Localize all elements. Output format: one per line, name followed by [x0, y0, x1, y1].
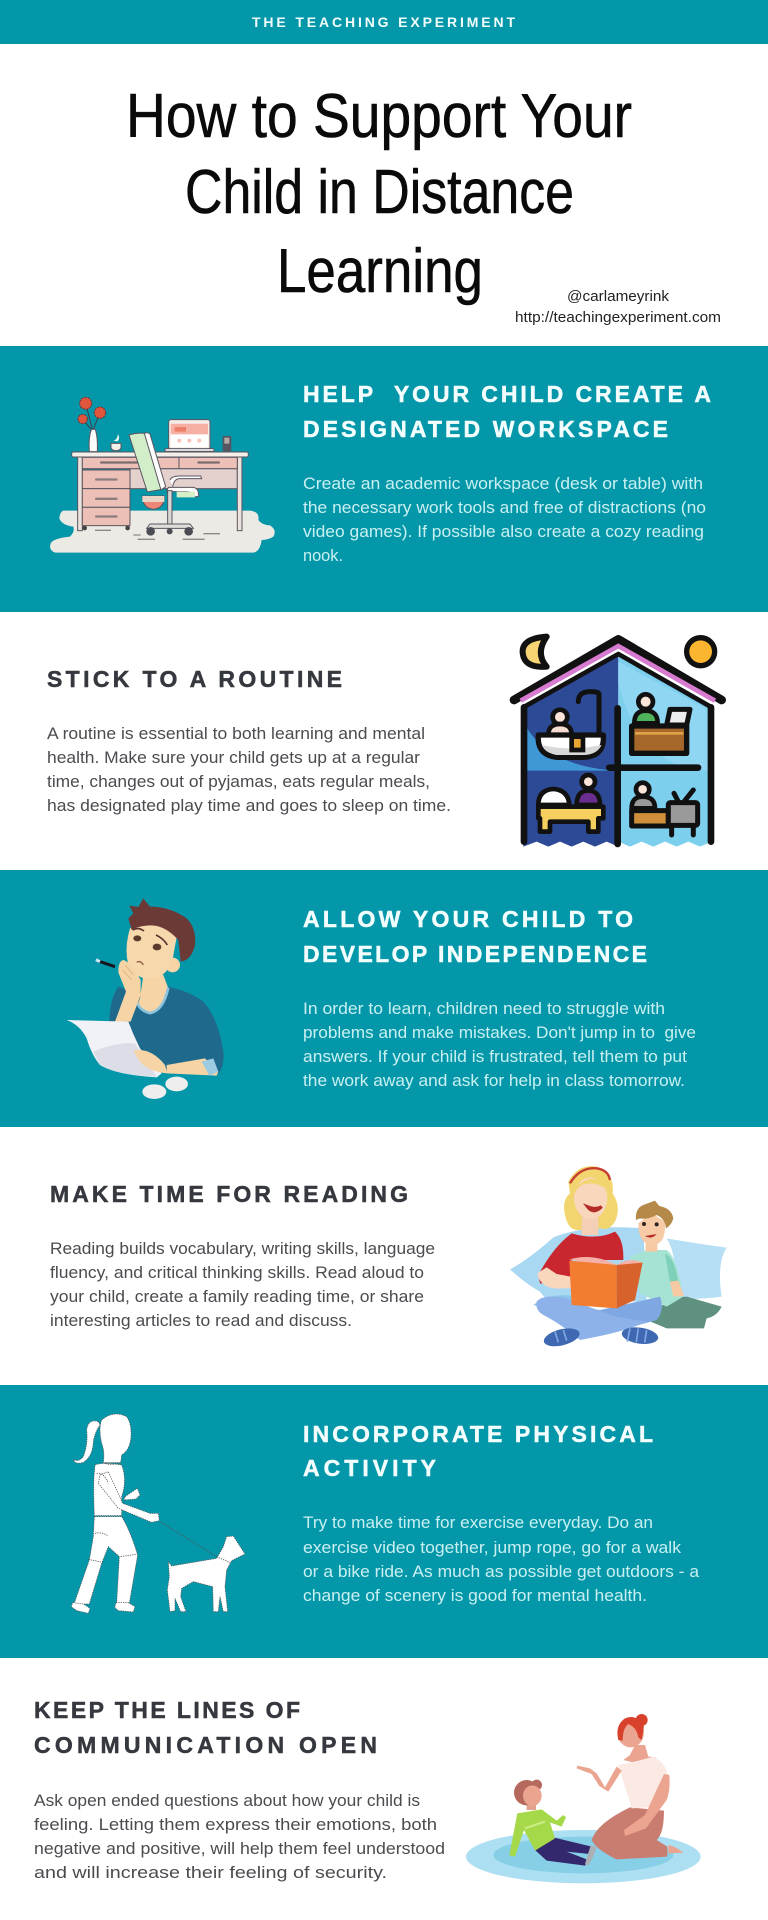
header banner [0, 0, 768, 44]
author credits: http://teachingexperiment.com [515, 310, 721, 326]
title: How to Support Your [126, 82, 632, 151]
heading [303, 381, 711, 442]
body text: nook. [303, 546, 343, 565]
title [126, 82, 632, 306]
title: Learning [277, 237, 483, 306]
heading: DEVELOP INDEPENDENCE [303, 941, 647, 967]
heading: INCORPORATE PHYSICAL [303, 1421, 653, 1447]
body text: Create an academic workspace (desk or table) with [303, 474, 703, 493]
body text [303, 474, 706, 565]
body text: fluency, and critical thinking skills. Read aloud to [50, 1263, 424, 1282]
heading [303, 1421, 653, 1481]
author credits [515, 289, 721, 326]
panel: physical activity [0, 1385, 768, 1658]
body text: Try to make time for exercise everyday. Do an [303, 1513, 653, 1532]
body text [47, 724, 451, 815]
body text: feeling. Letting them express their emotions, both [34, 1815, 437, 1834]
body text: health. Make sure your child gets up at a regular [47, 748, 420, 767]
body text: Reading builds vocabulary, writing skills, language [50, 1239, 435, 1258]
heading: ALLOW YOUR CHILD TO [303, 906, 633, 932]
body text: Ask open ended questions about how your child is [34, 1791, 420, 1810]
body text: the work away and ask for help in class tomorrow. [303, 1071, 685, 1090]
body text: In order to learn, children need to struggle with [303, 999, 665, 1018]
header banner: THE TEACHING EXPERIMENT [252, 14, 515, 30]
body text: time, changes out of pyjamas, eats regular meals, [47, 772, 430, 791]
body text: or a bike ride. As much as possible get outdoors - a [303, 1562, 700, 1581]
body text [50, 1239, 435, 1330]
author credits: @carlameyrink [567, 289, 670, 305]
title: Child in Distance [185, 158, 574, 227]
panel: routine [47, 637, 722, 847]
body text: negative and positive, will help them feel understood [34, 1839, 445, 1858]
heading: KEEP THE LINES OF [34, 1697, 300, 1723]
icon: mother talking with child on rug [466, 1714, 701, 1883]
heading: MAKE TIME FOR READING [50, 1181, 408, 1207]
body text: interesting articles to read and discuss. [50, 1311, 352, 1330]
panel: designated workspace [0, 346, 768, 612]
icon: house with family rooms [514, 637, 722, 847]
heading: STICK TO A ROUTINE [47, 666, 342, 692]
panel: communication [34, 1697, 701, 1883]
body text [303, 999, 696, 1090]
heading: COMMUNICATION OPEN [34, 1732, 377, 1758]
body text: the necessary work tools and free of distractions (no [303, 498, 706, 517]
body text [34, 1791, 445, 1882]
icon: thinking boy [67, 898, 224, 1099]
body text: has designated play time and goes to sleep on time. [47, 796, 451, 815]
body text: A routine is essential to both learning and mental [47, 724, 425, 743]
body text: change of scenery is good for mental health. [303, 1586, 647, 1605]
heading: ACTIVITY [303, 1455, 436, 1481]
body text: and will increase their feeling of security. [34, 1863, 387, 1882]
body text [303, 1513, 700, 1605]
panel: independence [0, 870, 768, 1127]
body text: problems and make mistakes. Don't jump in to give [303, 1023, 696, 1042]
icon: mother reading with son [510, 1166, 727, 1350]
icon: girl walking dog [71, 1414, 245, 1613]
heading [303, 906, 647, 967]
heading [34, 1697, 377, 1758]
body text: answers. If your child is frustrated, tell them to put [303, 1047, 687, 1066]
body text: your child, create a family reading time, or share [50, 1287, 424, 1306]
icon: desk workspace [50, 397, 275, 553]
heading: HELP YOUR CHILD CREATE A [303, 381, 711, 407]
heading: DESIGNATED WORKSPACE [303, 416, 668, 442]
panel: reading [50, 1166, 727, 1350]
body text: video games). If possible also create a cozy reading [303, 522, 704, 541]
body text: exercise video together, jump rope, go for a walk [303, 1538, 682, 1557]
